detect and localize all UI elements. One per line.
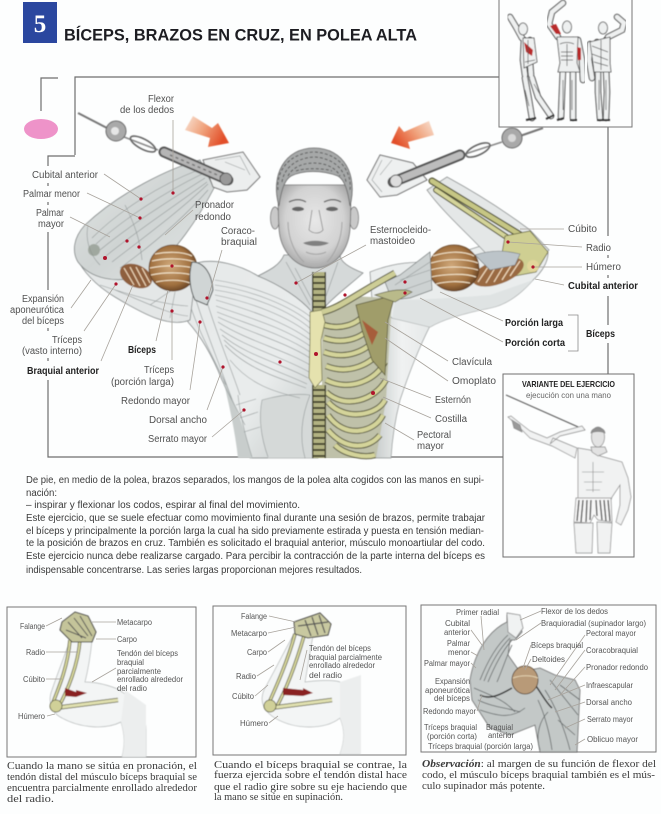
muscular arm labels: Pectoral mayor [586,629,636,638]
muscular arm labels: del bíceps [434,694,470,703]
labels: left side: Cubital anterior [32,170,99,181]
labels: right side: Porción corta [505,338,565,349]
mouth [303,241,329,246]
muscular arm labels: Cubital [445,619,470,628]
muscular arm labels: Braquial [486,723,513,732]
labels: left side: aponeurótica [10,305,64,316]
hair [276,148,352,206]
main anatomical figure [74,113,549,458]
labels: left side: Palmar [36,208,65,219]
left cable handle [78,113,232,185]
elbow joint [500,231,548,276]
muscular arm labels: Tríceps braquial [424,723,477,732]
labels: left side: braquial [221,237,257,248]
inset figure: front view [549,3,583,120]
panel: muscular arm [421,605,656,752]
panel: supination arm [213,606,406,755]
labels: left side: Braquial anterior [27,366,99,377]
variant subheading: ejecución con una mano [526,390,611,400]
caption: supination [214,760,407,803]
labels: left side: del bíceps [22,316,64,327]
labels: left side: Serrato mayor [148,434,208,445]
supination labels: Tendón del bíceps [309,644,371,653]
ribcage backing [322,296,392,458]
muscular arm labels: Dorsal ancho [586,698,633,707]
pronation labels: Húmero [18,712,46,721]
right hand [367,155,427,197]
text block: exercise instructions: el bíceps y principalmente la porción larga la cual ha sido previamente estirada y puesta en tensión median- [26,526,484,537]
panel: pronation arm [7,607,196,757]
caption: pronation: Cuando la mano se sitúa en pronación, el [7,761,197,772]
pronation arm illustration [50,612,146,757]
muscular arm labels: anterior [488,731,514,740]
pectoral fibres [190,280,312,458]
pronation labels: enrollado alrededor [117,675,183,684]
ears [270,207,280,229]
text block: exercise instructions: – inspirar y flexionar los codos, espirar al final del movimiento. [26,500,300,511]
labels: right side: Cubital anterior [568,281,638,292]
caption: pronation: del radio. [7,794,54,805]
labels: right side: Esternocleido- [370,225,431,236]
muscular arm labels [423,607,649,751]
abdominal shading [260,394,312,458]
head [270,148,358,268]
pink oval marker [24,119,58,139]
labels: left side: Dorsal ancho [149,415,207,426]
labels: left side: Tríceps [144,365,174,376]
supination labels [231,612,383,728]
supination labels: Carpo [247,648,267,657]
pronation labels: Metacarpo [117,618,153,627]
muscular arm labels: Primer radial [456,608,499,617]
text block: exercise instructions: te la posición de brazos en cruz. También es solicitado el braquial anterior, músculo monoartiular del codo. [26,538,485,549]
muscular arm labels: aponeurótica [425,686,471,695]
red arrow [283,688,313,696]
labels: left side: Pronador [195,200,235,211]
title: BÍCEPS, BRAZOS EN CRUZ, EN POLEA ALTA [64,26,417,44]
pronation labels: Falange [20,622,45,631]
clavicle [322,273,395,312]
supination labels: Radio [236,672,257,681]
left brachialis [116,259,156,293]
supination labels: Metacarpo [231,629,268,638]
scapula [356,295,395,375]
red arrow [65,688,87,697]
labels: left side: mayor [38,219,65,230]
caption: supination: Cuando el bíceps braquial se contrae, la [214,760,407,771]
caption: observation: codo, el músculo bíceps braquial también es el mús- [422,770,656,781]
muscular arm labels: Redondo mayor [423,707,476,716]
labels: right side: Radio [586,243,611,254]
supination leader lines [255,616,307,723]
labels: left side: Expansión [22,294,64,305]
labels: right side: Costilla [435,414,467,425]
ribcage [324,312,386,456]
panel: muscle location inset [499,0,632,127]
muscular arm labels: Bíceps braquial [531,641,583,650]
pronation labels: Carpo [117,635,137,644]
labels: right side: Omoplato [452,376,496,387]
text block: exercise instructions: Este ejercicio nunca debe realizarse cargado. Para percibir la contracción de la parte interna del bíceps es [26,551,485,562]
labels: right side: Húmero [586,262,621,273]
torso and back muscles [188,261,318,458]
text block: exercise instructions [26,475,486,576]
caption: supination: la mano se sitúe en supinación. [214,792,343,803]
labels: right side: Clavícula [452,357,492,368]
caption: observation [422,759,656,792]
pronation leader lines [46,618,116,716]
right cable handle [390,128,543,187]
muscular arm illustration [470,613,580,752]
nose [309,210,323,233]
labels: left side: Palmar menor [23,189,81,200]
supination labels: braquial parcialmente [309,653,383,662]
leader lines [70,120,582,440]
caption: observation: Observación : al margen de su función de flexor del [422,759,656,770]
labels: right side: Porción larga [505,318,563,329]
text block: exercise instructions: indispensable concentrarse. Las series largas proporcionan mejores resultados. [26,565,362,576]
labels: right side: mastoideo [370,236,415,247]
muscular arm labels: anterior [444,628,470,637]
supination labels: Cúbito [232,692,255,701]
right torso pale area [372,305,432,458]
pronation labels: del radio [117,684,148,693]
neck and trapezius [258,255,363,312]
face [278,185,351,268]
labels: right side: Cúbito [568,224,597,235]
ulna and radius bones [432,181,522,246]
panel: exercise variant [503,374,634,557]
pronation labels: parcialmente [117,667,162,676]
labels: right side: Esternón [435,395,471,406]
muscular arm labels: Deltoides [532,655,565,664]
frame lines [41,77,608,457]
supination labels: enrollado alrededor [309,661,375,670]
muscular arm labels: Pronador redondo [586,663,649,672]
labels: left side: Bíceps [128,345,156,356]
pronation labels [18,618,183,721]
muscular arm labels: menor [448,648,470,657]
labels: left side: Tríceps [52,335,82,346]
muscular arm leader lines [471,611,585,745]
pronation labels: Cúbito [23,675,46,684]
muscular arm labels: Flexor de los dedos [541,607,608,616]
text block: exercise instructions: nación: [26,488,57,499]
biceps [512,666,538,694]
labels: right side: mayor [417,441,445,452]
labels: right side: Pectoral [417,430,451,441]
left hand [203,152,260,192]
muscular arm labels: Serrato mayor [587,715,633,724]
labels: right side: Bíceps [586,329,615,340]
right forearm [427,177,549,262]
labels: right side [370,224,638,452]
biceps tendons to shoulder [385,252,432,300]
supination arm illustration [262,613,361,754]
right motion arrow [391,121,434,149]
sternum [309,310,325,388]
caption: pronation: encuentra parcialmente enrollado alrededor [7,783,198,794]
caption: pronation [7,761,198,805]
caption: supination: que el radio gire sobre su eje haciendo que [214,782,407,793]
muscular arm labels: Expansión [435,677,470,686]
left forearm [74,160,214,280]
muscular arm labels: (porción corta) [427,732,477,741]
number badge: 5 [34,11,46,38]
left biceps [149,245,197,291]
left shoulder cuff [190,262,213,305]
supination labels: Falange [241,612,267,621]
labels: left side [10,94,257,445]
labels: left side: (porción larga) [111,377,174,388]
left motion arrow [185,116,229,147]
variant heading: VARIANTE DEL EJERCICIO [522,379,615,389]
right upper arm [370,240,548,327]
variant figure [506,395,631,553]
left upper arm triceps [77,240,197,322]
muscular arm labels: Braquioradial (supinador largo) [541,619,646,628]
pronation labels: Tendón del bíceps [117,649,178,658]
inset figure: back view [589,17,624,120]
muscular arm labels: Coracobraquial [586,646,638,655]
pronation labels: Radio [26,648,45,657]
muscle marker dots [103,191,535,412]
labels: left side: Coraco- [221,226,255,237]
muscular arm labels: Palmar [447,639,470,648]
number badge [23,2,57,43]
eyes [292,207,338,211]
labels: left side: de los dedos [120,105,174,116]
labels: left side: Flexor [148,94,175,105]
inset figure: side view [510,17,554,120]
text block: exercise instructions: Este ejercicio, que se suele efectuar como movimiento final durante una sesión de brazos, permite trabajar [26,513,486,524]
caption: observation: culo supinador más potente. [422,781,545,792]
supination labels: del radio [309,671,343,680]
pronation labels: braquial [117,658,144,667]
caption: pronation: tendón distal del músculo bíceps braquial se [7,772,197,783]
spine [312,272,326,458]
muscular arm labels: Oblicuo mayor [587,735,638,744]
supination labels: Húmero [240,719,269,728]
right forearm tendons [475,251,520,270]
right brachialis [469,251,527,293]
labels: left side: redondo [195,212,231,223]
right biceps [429,245,479,291]
muscular arm labels: Infraescapular [586,681,633,690]
labels: left side: (vasto interno) [22,346,82,357]
text block: exercise instructions: De pie, en medio de la polea, brazos separados, los mangos de la polea alta cogidos con las manos en supi- [26,475,484,486]
muscular arm labels: Palmar mayor [424,659,470,668]
muscular arm labels: Tríceps braquial (porción larga) [428,742,533,751]
caption: supination: fuerza ejercida sobre el tendón distal hace [214,770,407,781]
labels: left side: Redondo mayor [121,396,191,407]
